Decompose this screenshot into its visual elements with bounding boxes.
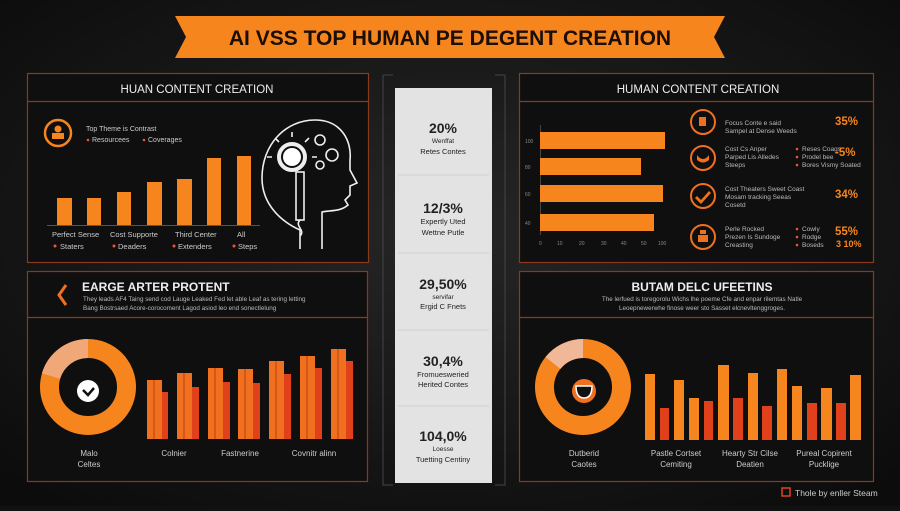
stat list with icons: 55% <box>835 226 858 238</box>
legend text: Resourcees <box>92 137 130 144</box>
grouped bar chart <box>147 349 353 439</box>
stat list with icons: Boseds <box>802 242 824 249</box>
stat list with icons: -5% <box>835 147 855 159</box>
panel: center statistics column: Tuetting Centiny <box>416 455 470 464</box>
panel: center statistics column <box>383 75 505 485</box>
panel: center statistics column: Ergid C Fnets <box>420 302 466 311</box>
stat list with icons: Bores Vismy Soated <box>802 162 861 169</box>
stat list with icons: Reses Coags <box>802 146 842 153</box>
panel: center statistics column: 29,50% <box>419 276 467 292</box>
chart labels: Dutberid <box>569 449 599 458</box>
chart labels: Colnier <box>161 449 187 458</box>
chart labels: Fastnerine <box>221 449 259 458</box>
stat list with icons: 35% <box>835 116 858 128</box>
stat list with icons <box>691 110 862 249</box>
chart labels: Pureal Copirent <box>796 449 853 458</box>
stat list with icons: Perle Rocked <box>725 226 764 233</box>
panel: center statistics column: Wettne Putle <box>422 228 464 237</box>
donut chart <box>544 348 622 426</box>
stat list with icons: Parped Lis Alledes <box>725 154 780 161</box>
icon: person circle <box>45 120 71 146</box>
bar labels: Extenders <box>178 242 212 251</box>
heading: EARGE ARTER PROTENT <box>82 280 230 294</box>
heading: HUAN CONTENT CREATION <box>121 84 273 96</box>
bar chart <box>47 156 260 226</box>
panel: center statistics column: Loesse <box>433 446 454 453</box>
stat list with icons: Prodel bee <box>802 154 834 161</box>
panel: top-right human content creation <box>519 74 874 262</box>
bar labels <box>52 230 257 251</box>
donut chart <box>50 348 126 426</box>
title banner: AI VSS TOP HUMAN PE DEGENT CREATION <box>229 27 671 50</box>
panel: center statistics column: Expertly Uted <box>420 217 466 226</box>
panel: center statistics column: 30,4% <box>423 353 463 369</box>
horizontal bar chart: 50 <box>641 241 647 247</box>
icon: chevron left <box>59 285 66 305</box>
bar labels: Cost Supporte <box>110 230 158 239</box>
panel: center statistics column: 104,0% <box>419 428 467 444</box>
chart labels: Pastle Cortset <box>651 449 702 458</box>
horizontal bar chart <box>525 125 667 247</box>
bar labels: Steps <box>238 242 257 251</box>
stat list with icons: Rodge <box>802 234 822 241</box>
horizontal bar chart: 0 <box>539 241 542 247</box>
description: Leoepnewerwhe finose weer sto Sasset elcnevltenggroges. <box>619 305 785 312</box>
chart labels: Malo <box>80 449 98 458</box>
stat list with icons: Prezen Is Sundoge <box>725 234 781 241</box>
chart labels: Pucklige <box>809 460 840 469</box>
stat list with icons: 3 10% <box>836 239 862 249</box>
chart labels: Celtes <box>78 460 100 469</box>
stat list with icons: Cosetd <box>725 202 746 209</box>
horizontal bar chart: 20 <box>579 241 585 247</box>
chart labels <box>78 449 336 469</box>
chart labels: Covnitr alinn <box>292 449 336 458</box>
panel: center statistics column: servifar <box>432 294 454 301</box>
horizontal bar chart: 40 <box>525 221 531 227</box>
description <box>602 296 803 312</box>
icon: head with gears <box>262 120 357 249</box>
panel: center statistics column: Retes Contes <box>420 147 466 156</box>
bar labels: Perfect Sense <box>52 230 99 239</box>
legend text: Coverages <box>148 137 182 144</box>
horizontal bar chart: 80 <box>525 165 531 171</box>
bar labels: Staters <box>60 242 84 251</box>
panel: center statistics column: 20% <box>429 120 458 136</box>
panel: center statistics column: Fromuesweried <box>417 370 469 379</box>
stat list with icons: Sampel at Dense Weeds <box>725 128 798 135</box>
panel: center statistics column: 12/3% <box>423 200 463 216</box>
stat list with icons: 34% <box>835 189 858 201</box>
description: They leads AF4 Taing send cod Lauge Leaked Fed let able Leaf as tering letting <box>83 296 306 303</box>
panel: bottom-right <box>519 272 874 482</box>
horizontal bar chart: 100 <box>525 139 534 145</box>
description: Bang Bostrsaed Acore-corocoment Lagod asiod leo end sonectlelung <box>83 305 277 312</box>
legend text <box>86 126 182 144</box>
panel: top-left human content creation <box>27 74 368 262</box>
stat list with icons: Cost Cs Anper <box>725 146 768 153</box>
chart labels: Caotes <box>571 460 597 469</box>
horizontal bar chart: 60 <box>525 192 531 198</box>
stat list with icons: Cowly <box>802 226 820 233</box>
horizontal bar chart: 30 <box>601 241 607 247</box>
chart labels: Deatien <box>736 460 764 469</box>
description: The lerfued is toregorolu Wichs lhe poeme Cfe and enpar rilemtas Natle <box>602 296 803 303</box>
bar chart <box>645 365 861 440</box>
horizontal bar chart: 40 <box>621 241 627 247</box>
panel: bottom-left <box>27 272 368 482</box>
chart labels: Cemiting <box>660 460 692 469</box>
description <box>83 296 306 312</box>
bar labels: Deaders <box>118 242 147 251</box>
horizontal bar chart: 100 <box>658 241 667 247</box>
horizontal bar chart: 10 <box>557 241 563 247</box>
bar labels: Third Center <box>175 230 217 239</box>
bar labels: All <box>237 230 246 239</box>
legend text: Top Theme is Contrast <box>86 126 156 133</box>
heading: BUTAM DELC UFEETINS <box>631 280 773 294</box>
panel: center statistics column: Wenffat <box>432 138 454 145</box>
stat list with icons: Focus Conte e said <box>725 120 781 127</box>
title banner <box>175 16 725 58</box>
panel: center statistics column: Herited Contes <box>418 380 468 389</box>
heading: HUMAN CONTENT CREATION <box>617 84 779 96</box>
stat list with icons: Mosam tracking Seeas <box>725 194 792 201</box>
stat list with icons: Creasting <box>725 242 753 249</box>
stat list with icons: Steeps <box>725 162 746 169</box>
chart labels: Hearty Str Cilse <box>722 449 779 458</box>
stat list with icons: Cost Theaters Sweet Coast <box>725 186 805 193</box>
footer credit: Thole by enller Steam <box>795 488 878 498</box>
chart labels <box>569 449 853 469</box>
